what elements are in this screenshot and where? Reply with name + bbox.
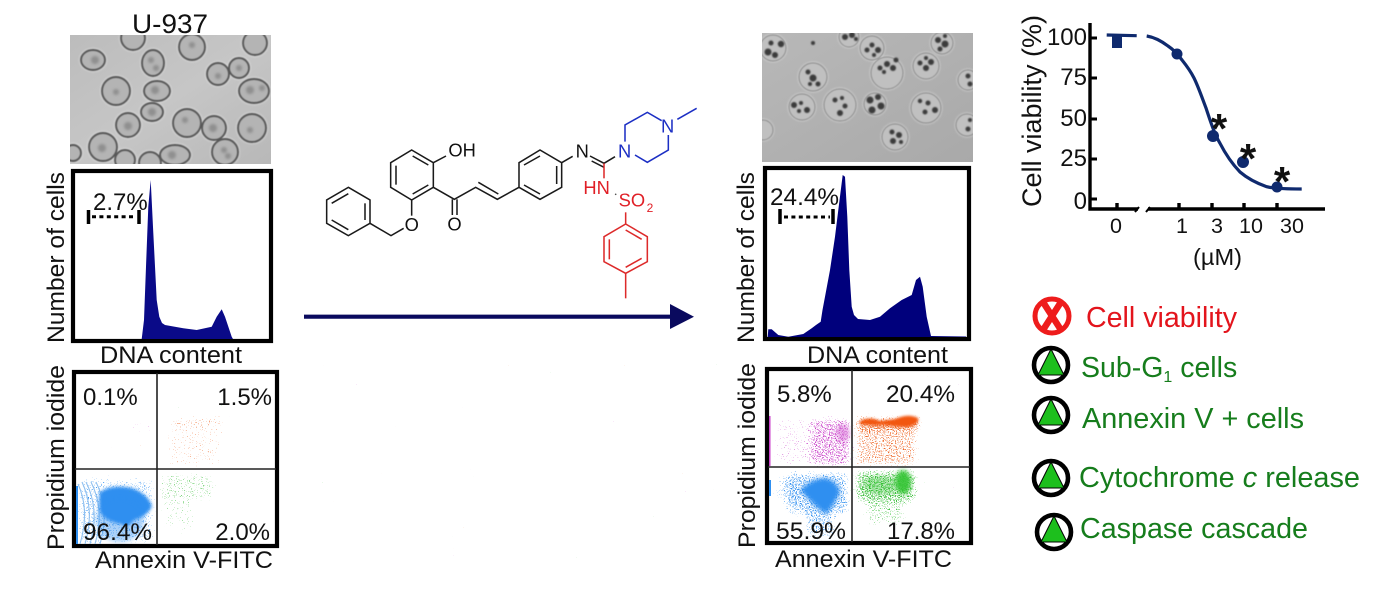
micrograph: untreated cells	[70, 35, 271, 164]
quadrant values: 0.1%	[83, 384, 138, 411]
x axis unit: (µM)	[1193, 244, 1242, 270]
scatter plot: annexin V treated	[767, 369, 971, 545]
scatter plot: annexin V untreated	[74, 372, 277, 546]
quadrant values	[83, 384, 272, 546]
y axis tick labels: 50	[1060, 105, 1087, 132]
blue methylpiperazine group: N	[618, 140, 631, 161]
y axis title: Cell viability (%)	[1017, 15, 1047, 207]
legend item: sub-G1 cells: Sub-G	[1081, 352, 1163, 384]
x axis tick labels: 3	[1211, 214, 1223, 238]
y axis tick labels: 25	[1060, 145, 1087, 172]
quadrant values: 5.8%	[777, 381, 832, 408]
legend item: annexin V positive cells: Annexin V + cells	[1082, 403, 1304, 435]
fitted curve	[1107, 35, 1302, 189]
blue methylpiperazine group: N	[661, 115, 674, 136]
black scaffold: N	[576, 140, 589, 161]
histogram: DNA content treated	[765, 168, 969, 339]
legend: effects	[1034, 299, 1360, 549]
sub-G1 gate bracket	[88, 210, 139, 224]
quadrant values: 1.5%	[217, 384, 272, 411]
population: live cells	[769, 472, 849, 538]
black scaffold: O	[447, 214, 462, 235]
black scaffold	[327, 140, 615, 236]
significance asterisks	[1211, 105, 1291, 205]
histogram: DNA content untreated	[73, 171, 271, 341]
axis label: propidium iodide: Propidium iodide	[43, 365, 70, 550]
population: necrotic sparse	[125, 420, 155, 434]
panel: treated U-937 cells	[733, 27, 978, 573]
axis label: number of cells: Number of cells	[43, 172, 70, 343]
population: late apoptotic sparse	[165, 418, 222, 466]
legend item: caspase cascade: Caspase cascade	[1080, 513, 1308, 545]
sub-G1 gate bracket	[780, 209, 833, 224]
title: U-937: U-937	[132, 9, 208, 39]
y axis tick labels: 75	[1060, 64, 1087, 91]
population: live cells	[76, 478, 154, 544]
legend item: cytochrome c release: Cytochrome c release	[1079, 462, 1360, 494]
black scaffold: O	[405, 214, 419, 235]
axis label: number of cells: Number of cells	[733, 172, 760, 343]
legend item: sub-G1 cells: 1	[1163, 369, 1172, 386]
y axis tick labels: 100	[1047, 24, 1087, 51]
x axis tick labels: 0	[1110, 214, 1122, 238]
significance asterisks: *	[1240, 135, 1257, 182]
axes and ticks	[1090, 23, 1325, 212]
significance asterisks: *	[1211, 105, 1228, 152]
quadrant values: 2.0%	[215, 519, 270, 546]
legend item: sub-G1 cells: cells	[1172, 352, 1237, 384]
quadrant values: 17.8%	[887, 518, 955, 545]
sub-G1 percentage: 2.7%	[93, 189, 148, 216]
x axis tick labels: 30	[1280, 214, 1304, 238]
significance asterisks: *	[1274, 158, 1291, 205]
quadrant values: 55.9%	[776, 518, 846, 545]
axis label: DNA content: DNA content	[100, 342, 242, 369]
quadrant values: 96.4%	[83, 519, 152, 546]
axis label: annexin V-FITC: Annexin V-FITC	[95, 547, 273, 574]
x axis tick labels	[1110, 214, 1304, 238]
y axis tick labels: 0	[1074, 188, 1087, 215]
x axis tick labels: 10	[1239, 214, 1263, 238]
red sulfonyl toluene group: HN	[583, 177, 610, 198]
panel: untreated U-937 cells	[43, 9, 277, 574]
chart: cell viability dose response	[1017, 15, 1325, 270]
legend item: cell viability decrease: Cell viability	[1086, 302, 1238, 334]
micrograph: treated apoptotic cells	[762, 33, 973, 162]
sub-G1 percentage: 24.4%	[770, 184, 839, 211]
data points	[1112, 35, 1282, 192]
blue methylpiperazine group	[618, 108, 697, 162]
quadrant values: 20.4%	[886, 381, 955, 408]
arrow: treatment	[304, 304, 694, 329]
axis label: DNA content: DNA content	[807, 342, 948, 369]
x axis tick labels: 1	[1176, 214, 1188, 238]
legend item: cell viability decrease	[1035, 299, 1238, 334]
population: necrotic	[769, 416, 851, 466]
population: late apoptotic	[855, 416, 921, 466]
chemical structure	[327, 108, 697, 298]
red sulfonyl toluene group: 2	[647, 201, 654, 215]
y axis tick labels	[1047, 24, 1087, 215]
axis label: annexin V-FITC: Annexin V-FITC	[775, 546, 952, 573]
legend item: sub-G1 cells	[1034, 348, 1237, 386]
red sulfonyl toluene group: SO	[619, 190, 645, 211]
quadrant values	[776, 381, 955, 545]
red sulfonyl toluene group	[583, 163, 654, 298]
population: early apoptotic sparse	[160, 473, 215, 531]
black scaffold: OH	[448, 140, 476, 161]
population: early apoptotic	[855, 470, 917, 525]
axis label: propidium iodide: Propidium iodide	[734, 363, 761, 548]
